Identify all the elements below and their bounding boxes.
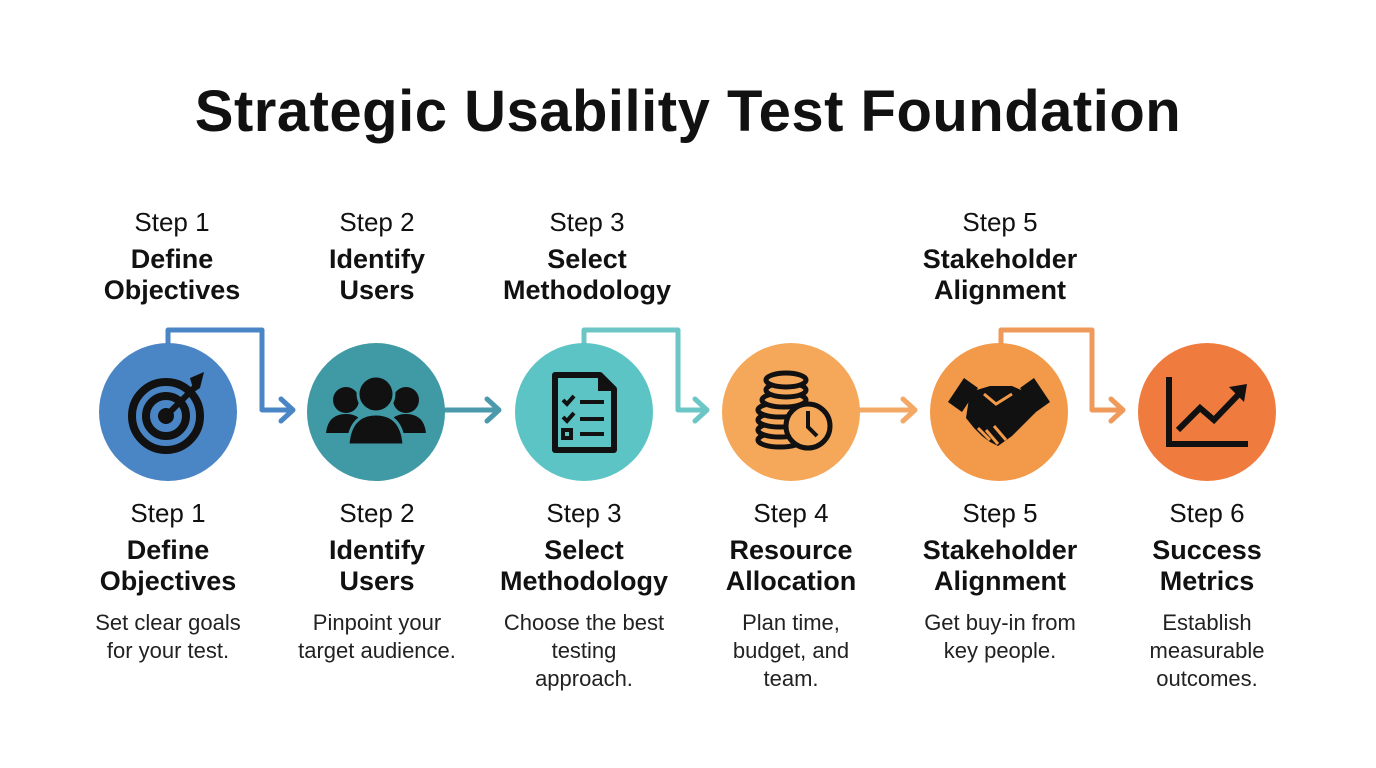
top label: step 2: Identify (329, 244, 425, 274)
circle 4: coins and clock (722, 343, 860, 481)
circle 1: target (99, 343, 237, 481)
bottom label: step 4: Step 4 (753, 498, 829, 528)
top label: step 1 (104, 207, 240, 305)
bottom label: step 1 (95, 498, 241, 663)
bottom label: step 4: budget, and (733, 638, 849, 663)
bottom label: step 1: Define (127, 535, 209, 565)
bottom label: step 1: Objectives (100, 566, 236, 596)
bottom label: step 5 (923, 498, 1077, 663)
bottom label: step 3: approach. (535, 666, 633, 691)
bottom label: step 2: Pinpoint your (313, 610, 441, 635)
bottom label: step 3: Select (544, 535, 624, 565)
title: Strategic Usability Test Foundation (195, 79, 1181, 144)
bottom label: step 4: Resource (729, 535, 853, 565)
arrow 2 to 3 (440, 399, 499, 421)
top label: step 2 (329, 207, 425, 305)
arrow 4 to 5 (856, 399, 915, 421)
top label: step 5: Stakeholder (923, 244, 1077, 274)
bottom label: step 5: key people. (944, 638, 1056, 663)
top label: step 1: Objectives (104, 275, 240, 305)
bottom label: step 5: Step 5 (962, 498, 1038, 528)
bottom label: step 6: Success (1152, 535, 1262, 565)
bottom label: step 1: Set clear goals (95, 610, 241, 635)
arrow 5 to 6 (1001, 330, 1123, 421)
arrow 3 to 4 (584, 330, 707, 421)
top label: step 3 (503, 207, 671, 305)
bottom label: step 6: Establish (1162, 610, 1252, 635)
top label: step 2: Step 2 (339, 207, 415, 237)
top label: step 3: Step 3 (549, 207, 625, 237)
circle 6: growth chart (1138, 343, 1276, 481)
bottom label: step 3: testing (552, 638, 616, 663)
circle 5: handshake (930, 343, 1068, 481)
bottom label: step 3 (500, 498, 668, 691)
bottom label: step 2: Identify (329, 535, 425, 565)
top label: step 5: Alignment (934, 275, 1066, 305)
bottom label: step 6: measurable (1150, 638, 1264, 663)
bottom label: step 2: Users (339, 566, 415, 596)
top label: step 1: Step 1 (134, 207, 210, 237)
bottom label: step 2 (298, 498, 456, 663)
bottom label: step 6 (1150, 498, 1264, 691)
top label: step 3: Select (547, 244, 627, 274)
bottom label: step 6: outcomes. (1156, 666, 1258, 691)
bottom label: step 6: Metrics (1160, 566, 1254, 596)
bottom label: step 3: Step 3 (546, 498, 622, 528)
circle 3: checklist (515, 343, 653, 481)
arrow 1 to 2 (168, 330, 293, 421)
bottom label: step 5: Stakeholder (923, 535, 1077, 565)
bottom label: step 2: Step 2 (339, 498, 415, 528)
bottom label: step 6: Step 6 (1169, 498, 1245, 528)
top label: step 3: Methodology (503, 275, 671, 305)
circle 2: users (307, 343, 445, 481)
top label: step 1: Define (131, 244, 213, 274)
bottom label: step 2: target audience. (298, 638, 456, 663)
bottom label: step 4: Allocation (726, 566, 856, 596)
bottom label: step 5: Alignment (934, 566, 1066, 596)
bottom label: step 4: team. (763, 666, 819, 691)
bottom label: step 5: Get buy-in from (924, 610, 1076, 635)
bottom label: step 4: Plan time, (742, 610, 840, 635)
top label: step 5 (923, 207, 1077, 305)
bottom label: step 3: Methodology (500, 566, 668, 596)
bottom label: step 1: for your test. (107, 638, 229, 663)
bottom label: step 3: Choose the best (504, 610, 664, 635)
bottom label: step 4 (726, 498, 856, 691)
top label: step 5: Step 5 (962, 207, 1038, 237)
bottom label: step 1: Step 1 (130, 498, 206, 528)
top label: step 2: Users (339, 275, 415, 305)
